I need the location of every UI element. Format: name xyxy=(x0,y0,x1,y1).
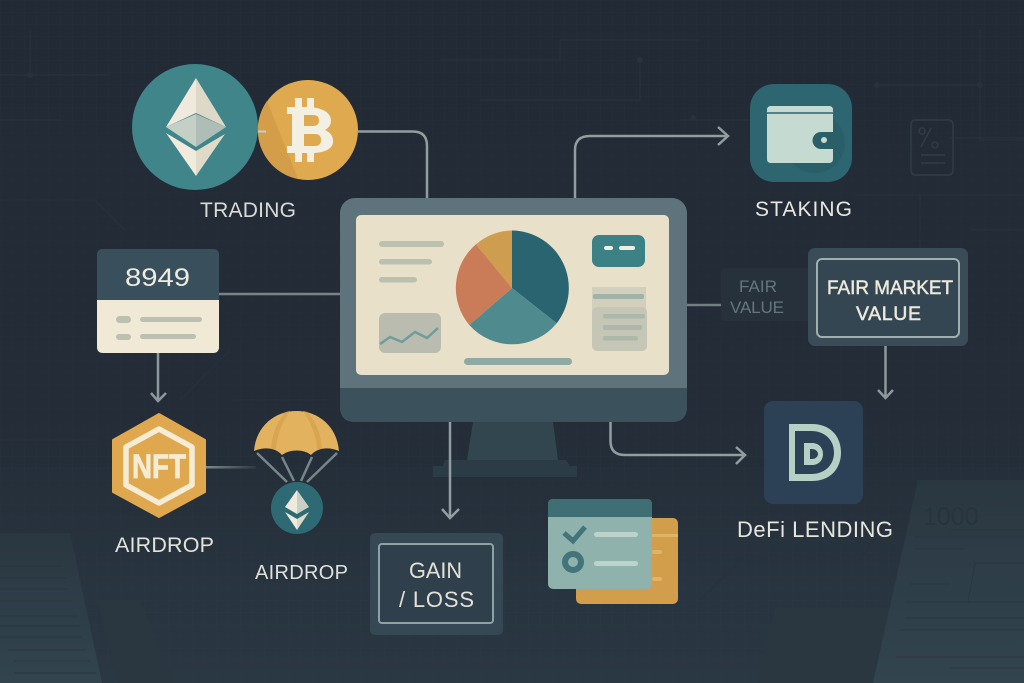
icon: staking wallet xyxy=(750,84,852,182)
panel: fair market value: FAIR MARKET xyxy=(827,277,953,299)
connector: monitor to fair value xyxy=(687,304,721,306)
connector: form 8949 to monitor xyxy=(219,293,340,295)
panel: gain and loss xyxy=(370,533,503,635)
panel: form 8949 card: 8949 xyxy=(125,264,190,292)
panel: gain and loss: / LOSS xyxy=(399,587,474,612)
arrow: monitor to staking xyxy=(575,127,728,198)
icon: NFT hexagon: NFT xyxy=(132,448,186,486)
screen badge xyxy=(592,235,645,267)
label: NFT airdrop: AIRDROP xyxy=(115,533,214,557)
panel: fair value (ghost): FAIR xyxy=(739,277,777,296)
panel: gain and loss: GAIN xyxy=(409,558,462,583)
screen text lines xyxy=(379,241,444,282)
panel: fair value (ghost) xyxy=(721,268,811,321)
icon: DeFi lending xyxy=(764,401,863,504)
icon: parachute with ethereum coin xyxy=(254,411,339,534)
background icon: percent document xyxy=(911,120,953,175)
icon: checklist cards xyxy=(548,499,678,604)
screen bottom bar xyxy=(464,358,572,365)
label: staking: STAKING xyxy=(755,198,852,221)
panel: fair market value: VALUE xyxy=(856,303,921,325)
icon: bitcoin coin xyxy=(258,80,358,180)
panel: fair market value xyxy=(808,248,968,346)
panel: fair value (ghost): VALUE xyxy=(730,298,784,317)
background tax documents: left xyxy=(0,533,175,683)
background tax documents: right: 1000 xyxy=(923,503,979,531)
arrow: form 8949 to NFT xyxy=(151,353,166,401)
monitor stand xyxy=(433,422,577,477)
icon: ethereum coin xyxy=(132,64,258,190)
screen document stack xyxy=(592,287,647,351)
label: trading: TRADING xyxy=(200,199,296,222)
arrow: monitor to DeFi lending xyxy=(610,422,745,464)
monitor screen xyxy=(356,215,669,375)
screen line chart xyxy=(379,313,441,353)
monitor xyxy=(340,198,687,477)
connector: bitcoin to monitor xyxy=(358,132,427,198)
panel: form 8949 card xyxy=(97,249,219,353)
arrow: fair market value to DeFi xyxy=(878,346,893,398)
arrow: monitor to gain and loss xyxy=(442,422,459,518)
pie chart xyxy=(456,230,569,344)
label: DeFi lending: DeFi LENDING xyxy=(737,517,893,542)
icon: NFT hexagon xyxy=(113,414,205,517)
monitor frame xyxy=(340,198,687,422)
background tax documents: right xyxy=(757,480,1024,683)
label: airdrop: AIRDROP xyxy=(255,562,348,584)
connector: NFT to airdrop xyxy=(206,466,256,468)
